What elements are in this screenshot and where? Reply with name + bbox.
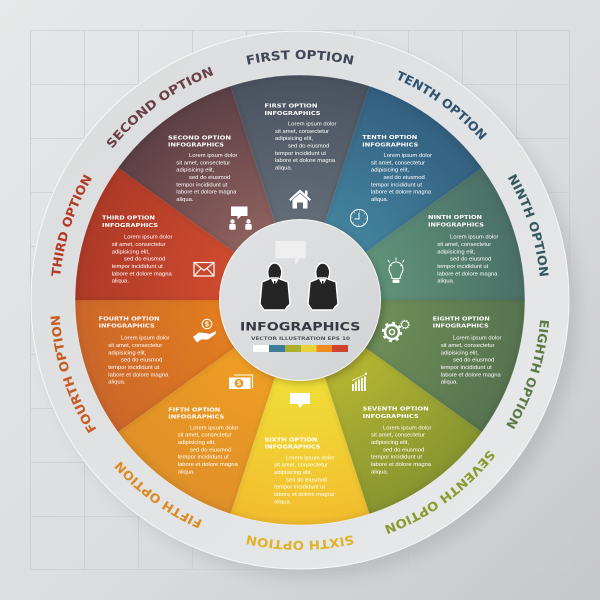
text block: tenth option: adipisicing elit, <box>371 168 409 174</box>
text block: seventh option: adipisicing elit, <box>371 440 409 446</box>
text block: seventh option: sed do eiusmod <box>383 447 424 453</box>
segment: second option <box>118 86 300 300</box>
text block: first option: labore et dolore magna <box>275 158 336 164</box>
icon: banknotes <box>229 375 252 389</box>
icon: house <box>289 190 311 208</box>
text block: second option: labore et dolore magna <box>176 190 237 196</box>
text block: seventh option: labore et dolore magna <box>371 462 432 468</box>
text block: second option: SECOND OPTION <box>168 135 231 141</box>
text block: seventh option: Lorem ipsum dolor <box>383 425 431 431</box>
text block: fifth option: tempor incididunt ut <box>178 455 229 461</box>
label: fourth option: FOURTH OPTION <box>50 316 96 433</box>
text block: second option: adipisicing elit, <box>176 168 215 174</box>
text block: sixth option: Lorem ipsum dolor <box>286 455 334 461</box>
icon: speech bubble <box>290 393 310 408</box>
text block: ninth option <box>428 215 498 285</box>
label: second option: SECOND OPTION <box>106 66 214 148</box>
text block: ninth option: sed do eiusmod <box>450 257 491 263</box>
text block: seventh option: tempor incididunt ut <box>371 455 422 461</box>
text block: sixth option: sit amet, consectetur <box>274 463 328 469</box>
text block: second option: aliqua. <box>176 197 194 203</box>
text block: third option: sit amet, consectetur <box>112 242 166 248</box>
label: first option: FIRST OPTION <box>246 50 354 65</box>
text block: eighth option: aliqua. <box>441 380 458 386</box>
label: tenth option: TENTH OPTION <box>398 70 487 140</box>
heading: INFOGRAPHICS <box>240 320 360 334</box>
text block: first option: aliqua. <box>275 165 293 171</box>
segment: third option <box>75 168 300 300</box>
text block: eighth option: sit amet, consectetur <box>441 343 495 349</box>
text block: third option: tempor incididunt ut <box>112 264 163 270</box>
segment: fifth option <box>118 300 300 514</box>
text block: fourth option: Lorem ipsum dolor <box>121 336 169 342</box>
text block: ninth option: NINTH OPTION <box>428 215 482 221</box>
text block: fifth option: FIFTH OPTION <box>168 407 221 413</box>
text block: third option: labore et dolore magna <box>112 271 173 277</box>
text block: sixth option: sed do eiusmod <box>286 477 327 483</box>
segment: first option <box>230 75 370 300</box>
text block: first option <box>264 104 336 171</box>
icon: hand with coin <box>193 319 216 342</box>
text block: third option: INFOGRAPHICS <box>102 223 158 229</box>
icon: gears <box>383 320 409 341</box>
text block: fourth option: adipisicing elit, <box>108 350 147 356</box>
text block: ninth option: aliqua. <box>437 279 455 285</box>
text block: eighth option <box>433 316 502 386</box>
text block: fourth option: sit amet, consectetur <box>108 343 162 349</box>
text block: second option: sed do eiusmod <box>189 175 230 181</box>
text block: first option: FIRST OPTION <box>264 104 318 110</box>
text block: first option: INFOGRAPHICS <box>264 111 320 117</box>
text block: ninth option: Lorem ipsum dolor <box>450 235 498 241</box>
text block: sixth option <box>264 437 335 505</box>
icon: clock <box>350 210 368 226</box>
text block: fifth option: adipisicing elit, <box>178 440 216 446</box>
text block: ninth option: adipisicing elit, <box>437 249 476 255</box>
text block: second option: Lorem ipsum dolor <box>189 153 237 159</box>
text block: second option: sit amet, consectetur <box>176 160 230 166</box>
text block: third option: Lorem ipsum dolor <box>124 235 172 241</box>
segment: tenth option <box>300 86 482 300</box>
text block: second option: tempor incididunt ut <box>176 182 228 188</box>
text block: tenth option: INFOGRAPHICS <box>362 142 418 148</box>
ring labels <box>50 50 549 550</box>
segment: fourth option <box>75 300 300 432</box>
text block: third option: THIRD OPTION <box>102 216 155 222</box>
text block: first option: tempor incididunt ut <box>275 151 326 157</box>
speech bubble <box>275 240 306 266</box>
text block: ninth option: sit amet, consectetur <box>437 242 491 248</box>
colour legend <box>253 345 348 352</box>
text block: sixth option: aliqua. <box>274 499 292 505</box>
text block: sixth option: INFOGRAPHICS <box>264 445 320 451</box>
text block: fifth option: sit amet, consectetur <box>178 433 232 439</box>
text block: first option: sit amet, consectetur <box>275 129 329 135</box>
text block: first option: Lorem ipsum dolor <box>288 122 336 128</box>
text block: fifth option <box>168 407 239 475</box>
text block: ninth option: INFOGRAPHICS <box>428 222 484 228</box>
segment: ninth option <box>300 168 525 300</box>
text block: seventh option: INFOGRAPHICS <box>363 414 419 420</box>
text block: fifth option: aliqua. <box>178 469 195 475</box>
segment: eighth option <box>300 300 525 432</box>
text block: eighth option: sed do eiusmod <box>453 358 494 364</box>
text block: fourth option: INFOGRAPHICS <box>99 324 155 330</box>
icon: people with chat bubble <box>229 206 252 230</box>
icon: hand with coin: $ <box>205 321 209 328</box>
icon: light bulb <box>388 258 404 283</box>
text block: sixth option: labore et dolore magna <box>274 492 335 498</box>
text block: fourth option: tempor incididunt ut <box>108 365 160 371</box>
label: seventh option: SEVENTH OPTION <box>384 450 494 534</box>
text block: third option: adipisicing elit, <box>112 249 150 255</box>
text block: tenth option: aliqua. <box>371 197 389 203</box>
text block: ninth option: labore et dolore magna <box>437 271 498 277</box>
text block: first option: adipisicing elit, <box>275 136 313 142</box>
text block: tenth option: sed do eiusmod <box>384 175 425 181</box>
text block: eighth option: labore et dolore magna <box>441 372 502 378</box>
text block: eighth option: tempor incididunt ut <box>441 365 492 371</box>
text block: first option: sed do eiusmod <box>288 143 329 149</box>
text block: seventh option: SEVENTH OPTION <box>363 407 429 413</box>
text block: fourth option: FOURTH OPTION <box>99 316 160 322</box>
text block: tenth option: sit amet, consectetur <box>371 160 425 166</box>
subheading: VECTOR ILLUSTRATION EPS 10 <box>251 336 350 342</box>
text block: seventh option <box>363 407 432 475</box>
text block: third option: sed do eiusmod <box>124 257 165 263</box>
segment: sixth option <box>230 300 370 525</box>
icon: banknotes: $ <box>237 381 241 388</box>
text block: fourth option: labore et dolore magna <box>108 372 169 378</box>
text block: eighth option: EIGHTH OPTION <box>433 316 490 322</box>
person right <box>308 263 338 310</box>
text block: eighth option: INFOGRAPHICS <box>433 324 489 330</box>
centre hub <box>220 220 383 383</box>
text block: third option: aliqua. <box>112 279 129 285</box>
text block: second option <box>168 135 237 203</box>
text block: eighth option: adipisicing elit, <box>441 350 479 356</box>
text block: tenth option: TENTH OPTION <box>362 135 418 141</box>
text block: tenth option: Lorem ipsum dolor <box>384 153 432 159</box>
text block: fourth option <box>99 316 169 386</box>
colour wheel <box>75 75 525 525</box>
person left <box>260 263 290 310</box>
text block: fifth option: Lorem ipsum dolor <box>190 425 238 431</box>
text block: seventh option: sit amet, consectetur <box>371 433 425 439</box>
text block: sixth option: adipisicing elit, <box>274 470 312 476</box>
text block: third option <box>102 216 173 285</box>
text block: fifth option: INFOGRAPHICS <box>168 415 224 421</box>
text block: ninth option: tempor incididunt ut <box>437 264 489 270</box>
text block: tenth option: tempor incididunt ut <box>371 182 422 188</box>
text block: second option: INFOGRAPHICS <box>168 143 224 149</box>
text block: tenth option <box>362 135 432 203</box>
text block: fourth option: sed do eiusmod <box>121 358 162 364</box>
label: ninth option: NINTH OPTION <box>508 174 549 276</box>
label: sixth option: SIXTH OPTION <box>246 535 354 550</box>
icon: growth bar chart <box>352 372 367 391</box>
segment: seventh option <box>300 300 482 514</box>
label: third option: THIRD OPTION <box>51 174 92 276</box>
text block: eighth option: Lorem ipsum dolor <box>453 336 501 342</box>
text block: fifth option: sed do eiusmod <box>190 447 231 453</box>
text block: tenth option: labore et dolore magna <box>371 190 432 196</box>
text block: sixth option: SIXTH OPTION <box>264 437 318 443</box>
text block: fifth option: labore et dolore magna <box>178 462 239 468</box>
text block: sixth option: tempor incididunt ut <box>274 485 325 491</box>
text block: fourth option: aliqua. <box>108 380 126 386</box>
label: eighth option: EIGHTH OPTION <box>506 320 549 430</box>
icon: envelope <box>194 262 214 276</box>
text block: seventh option: aliqua. <box>371 469 389 475</box>
label: fifth option: FIFTH OPTION <box>114 461 202 528</box>
